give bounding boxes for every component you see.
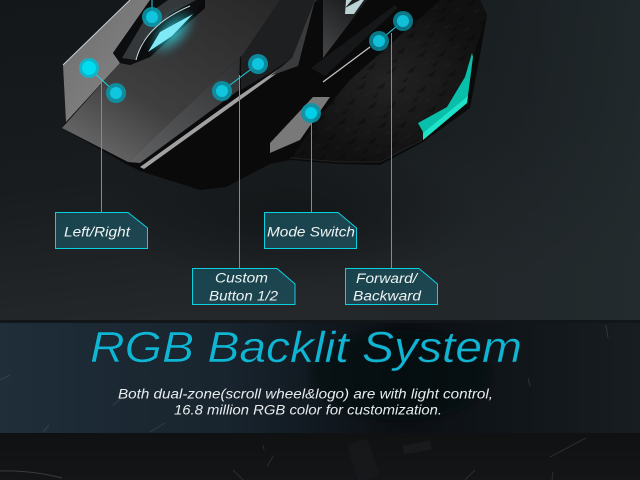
hotspot: custom button 2 bbox=[248, 54, 268, 74]
hotspot: scroll wheel bbox=[142, 7, 162, 27]
hotspot: forward bbox=[369, 31, 389, 51]
label: Forward/Backward: Backward bbox=[353, 288, 422, 304]
forward/back strip bbox=[311, 5, 398, 76]
label: Left/Right: Left/Right bbox=[64, 224, 131, 240]
label: Forward/Backward bbox=[346, 268, 438, 304]
label: Mode Switch: Mode Switch bbox=[267, 224, 355, 240]
title: RGB Backlit System bbox=[90, 323, 522, 372]
hotspot: right bbox=[106, 83, 126, 103]
background bbox=[0, 0, 640, 323]
label: Custom Button 1/2: Button 1/2 bbox=[209, 288, 279, 304]
label: Custom Button 1/2: Custom bbox=[215, 270, 268, 286]
label: Custom Button 1/2 bbox=[192, 268, 295, 304]
callout lines bbox=[89, 0, 403, 268]
hotspot: left bbox=[79, 58, 99, 78]
description text: Both dual-zone(scroll wheel&logo) are with light control, bbox=[118, 386, 493, 402]
panel: footer strip bbox=[0, 433, 640, 480]
cyan accent bbox=[418, 53, 473, 140]
description text bbox=[118, 386, 493, 418]
mouse body bbox=[62, 0, 487, 190]
main button panel bbox=[62, 0, 318, 162]
logo panel bbox=[323, 0, 367, 58]
palm rest texture bbox=[290, 0, 487, 162]
scroll wheel bbox=[113, 0, 205, 65]
light strip bbox=[140, 68, 280, 169]
hotspot: custom button 1 bbox=[212, 81, 232, 101]
left silver button panel bbox=[63, 0, 150, 122]
panel: backlit band bbox=[0, 323, 640, 433]
hotspot: mode switch bbox=[301, 103, 321, 123]
label: Mode Switch bbox=[264, 212, 356, 248]
mode switch button bbox=[270, 97, 330, 153]
mouse shell bbox=[62, 0, 487, 190]
side button panel bbox=[128, 57, 240, 163]
hotspot: backward bbox=[393, 11, 413, 31]
label: Left/Right bbox=[56, 212, 148, 248]
label: Forward/Backward: Forward/ bbox=[356, 271, 418, 286]
description text: 16.8 million RGB color for customization. bbox=[174, 402, 442, 418]
